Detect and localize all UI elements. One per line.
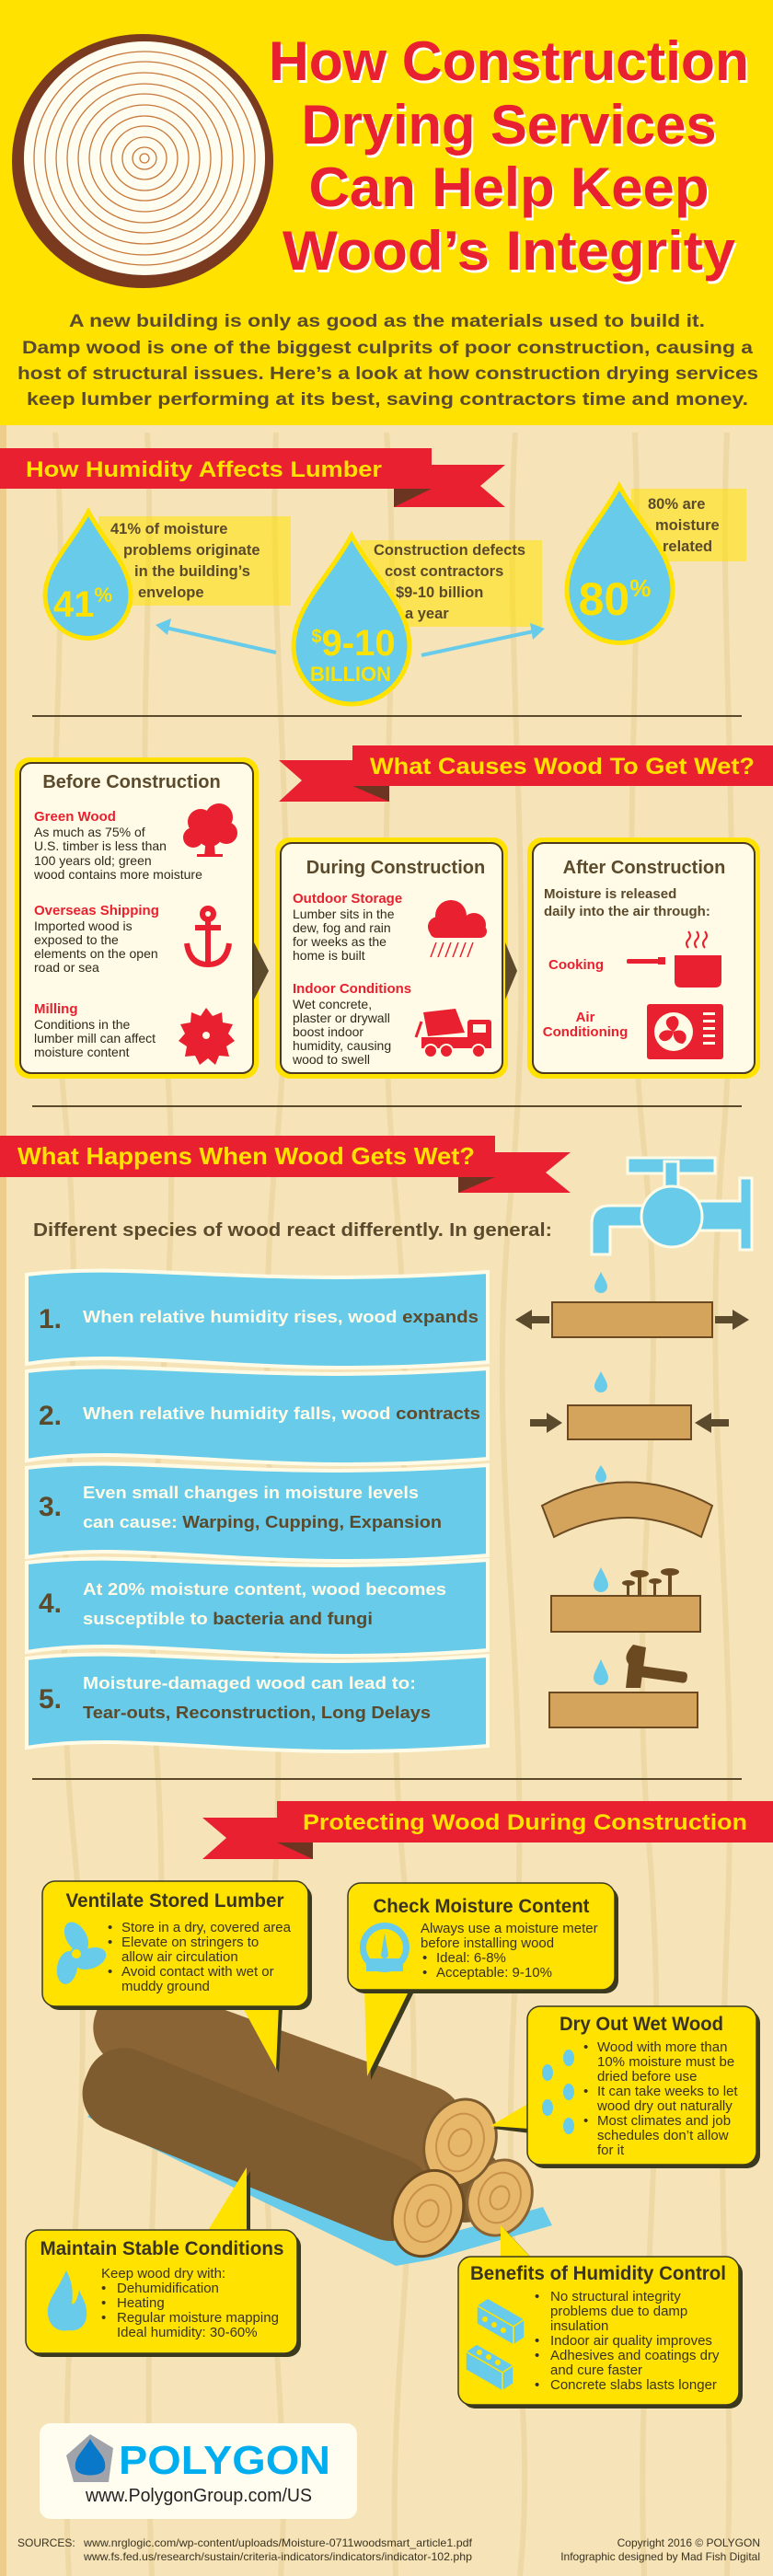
callout: benefits of humidity control: •: [535, 2377, 539, 2393]
callout: ventilate stored lumber: Store in a dry, covered area: [121, 1920, 292, 1935]
panel: after construction: After Construction: [563, 858, 725, 878]
text: outdoor storage: [293, 891, 402, 963]
logo box: www.PolygonGroup.com/US: [85, 2486, 312, 2506]
callout: dry out wet wood: Wood with more than: [597, 2039, 727, 2055]
callout: check moisture content: Check Moisture Content: [374, 1896, 589, 1917]
stat: 80%: 80: [579, 573, 629, 625]
icon: AC unit: [647, 1004, 723, 1059]
banner 5: tear-outs: [27, 1655, 488, 1751]
text: milling: moisture content: [34, 1045, 130, 1059]
banner 4: bacteria and fungi: [27, 1559, 488, 1656]
callout: dry out wet wood: •: [583, 2084, 588, 2099]
callout: maintain stable conditions: •: [101, 2310, 106, 2326]
logo box: [40, 2423, 357, 2519]
text: outdoor storage: Outdoor Storage: [293, 891, 402, 907]
ribbon: What Causes Wood To Get Wet?: [279, 745, 773, 802]
title: How Construction: [271, 33, 751, 95]
title: Drying Services: [302, 94, 716, 156]
text: outdoor storage: Lumber sits in the: [293, 907, 395, 921]
ribbon: How Humidity Affects Lumber: How Humidity Affects Lumber: [26, 457, 382, 482]
callout: check moisture content: [348, 1883, 618, 2080]
banner 2: contracts: 2.: [39, 1401, 62, 1431]
stat: 41%: problems originate: [123, 542, 260, 559]
text: milling: Conditions in the: [34, 1017, 131, 1032]
ribbon: Protecting Wood During Construction: [202, 1801, 773, 1859]
icon: board with hammer: [549, 1645, 698, 1727]
text: green wood: Green Wood: [34, 809, 116, 825]
callout: benefits of humidity control: [458, 2225, 743, 2409]
callout: dry out wet wood: for it: [597, 2143, 625, 2158]
text: milling: Milling: [34, 1001, 77, 1017]
callout: benefits of humidity control: and cure faster: [550, 2362, 642, 2378]
panel: before construction: Before Construction: [42, 772, 221, 792]
callout: check moisture content: Acceptable: 9-10%: [436, 1965, 552, 1981]
callout: benefits of humidity control: •: [535, 2348, 539, 2363]
callout: ventilate stored lumber: •: [108, 1964, 112, 1980]
banner 1: expands: [27, 1271, 488, 1368]
stat: 41%: in the building’s: [134, 563, 250, 580]
text: green wood: As much as 75% of: [34, 825, 145, 839]
callout: benefits of humidity control: insulation: [550, 2318, 608, 2334]
title: Wood’s Integrity: [284, 223, 738, 284]
panel: after construction: Conditioning: [543, 1024, 628, 1040]
text: indoor conditions: humidity, causing: [293, 1038, 391, 1053]
sources: SOURCES:: [17, 2536, 75, 2549]
banner 3: warping: Even small changes in moisture levels: [83, 1484, 419, 1502]
title: Wood’s Integrity: [283, 220, 736, 282]
text: indoor conditions: plaster or drywall: [293, 1011, 390, 1025]
logo box: POLYGON: [119, 2438, 330, 2483]
copyright: [560, 2536, 760, 2563]
callout: dry out wet wood: Dry Out Wet Wood: [560, 2014, 723, 2035]
callout: ventilate stored lumber: •: [108, 1920, 112, 1935]
icon: saw blade: [179, 1008, 235, 1065]
callout: maintain stable conditions: Keep wood dry with:: [101, 2266, 225, 2281]
callout: benefits of humidity control: •: [535, 2333, 539, 2349]
banner 4: bacteria and fungi: susceptible to bacteria and fungi: [83, 1610, 373, 1628]
stat: $9-10 billion: 9-10: [322, 623, 396, 664]
callout: maintain stable conditions: Ideal humidity: 30-60%: [117, 2325, 258, 2340]
title: [269, 30, 751, 284]
stat: 41%: [45, 512, 260, 639]
panel: after construction: [527, 837, 760, 1079]
icon: anchor: [187, 908, 229, 965]
text: milling: lumber mill can affect: [34, 1031, 156, 1045]
copyright: Copyright 2016 © POLYGON: [617, 2536, 760, 2549]
text: overseas shipping: [34, 903, 159, 975]
callout: check moisture content: before installing wood: [421, 1935, 554, 1951]
callout: check moisture content: Ideal: 6-8%: [436, 1950, 506, 1966]
text: milling: [34, 1001, 156, 1059]
callout: benefits of humidity control: Adhesives and coatings dry: [550, 2348, 720, 2363]
banner 4: bacteria and fungi: At 20% moisture content, wood becomes: [83, 1580, 446, 1599]
callout: ventilate stored lumber: •: [108, 1935, 112, 1950]
banner 2: contracts: When relative humidity falls, wood contracts: [83, 1404, 480, 1423]
text: indoor conditions: [292, 981, 411, 1067]
text: overseas shipping: Overseas Shipping: [34, 903, 159, 918]
ribbon: What Causes Wood To Get Wet?: What Causes Wood To Get Wet?: [370, 754, 755, 780]
icon: tree: [183, 803, 237, 857]
callout: benefits of humidity control: No structural integrity: [550, 2289, 681, 2305]
icon: pot: [627, 931, 721, 988]
stat: 80%: [567, 486, 720, 642]
icon: contracting board: [530, 1371, 729, 1439]
callout: benefits of humidity control: problems due to damp: [550, 2304, 687, 2319]
callout: check moisture content: •: [422, 1965, 427, 1981]
panel: after construction: Moisture is released: [544, 886, 676, 902]
panel: after construction: daily into the air through:: [544, 904, 710, 919]
stat: 41%: 41: [53, 584, 94, 625]
callout: dry out wet wood: wood dry out naturally: [596, 2098, 733, 2114]
text: green wood: 100 years old; green: [34, 853, 152, 868]
intro paragraph: [17, 311, 758, 410]
text: green wood: U.S. timber is less than: [34, 838, 167, 853]
stat: 41%: envelope: [138, 584, 204, 601]
callout: ventilate stored lumber: Elevate on stringers to: [121, 1935, 259, 1950]
callout: ventilate stored lumber: allow air circulation: [121, 1949, 238, 1965]
banner 5: tear-outs: 5.: [39, 1684, 62, 1715]
text: different species: Different species of wood react differently. In general:: [33, 1219, 552, 1241]
intro paragraph: host of structural issues. Here’s a look at how construction drying services: [17, 364, 758, 384]
icon: board with mushrooms: [551, 1567, 700, 1632]
stat: $9-10 billion: $9-10 billion: [396, 584, 483, 601]
ribbon: Protecting Wood During Construction: Protecting Wood During Construction: [303, 1810, 747, 1835]
callout: dry out wet wood: It can take weeks to let: [597, 2084, 738, 2099]
stat: 80%: %: [629, 574, 651, 602]
text: indoor conditions: boost indoor: [293, 1024, 363, 1039]
icon: bricks: [466, 2298, 525, 2391]
stat: $9-10 billion: Construction defects: [374, 542, 525, 559]
title: How Construction: [269, 30, 749, 92]
callout: dry out wet wood: •: [583, 2039, 588, 2055]
panel: during construction: [275, 837, 517, 1079]
stat text boxes: [98, 489, 746, 627]
icon: flame: [48, 2270, 87, 2330]
text: indoor conditions: Wet concrete,: [293, 997, 372, 1011]
text: outdoor storage: dew, fog and rain: [293, 920, 391, 935]
title: Drying Services: [304, 97, 718, 158]
stat: $9-10 billion: [294, 536, 525, 704]
banner 1: expands: 1.: [39, 1304, 62, 1334]
icon: rain cloud: [428, 900, 487, 957]
icon: gauge: [360, 1923, 410, 1972]
title: Can Help Keep: [309, 156, 709, 218]
callout: check moisture content: Always use a moisture meter: [421, 1921, 598, 1936]
banner 2: contracts: [27, 1368, 488, 1464]
icon: fan: [54, 1918, 110, 1986]
text: green wood: wood contains more moisture: [33, 867, 202, 882]
callout: ventilate stored lumber: Avoid contact with wet or: [121, 1964, 274, 1980]
arrows between stats: [156, 618, 545, 655]
icon: warped board: [542, 1465, 712, 1537]
callout: maintain stable conditions: Heating: [117, 2295, 165, 2311]
callout: dry out wet wood: schedules don’t allow: [597, 2128, 729, 2143]
text: green wood: [33, 809, 202, 882]
text: outdoor storage: for weeks as the: [293, 934, 386, 949]
text: overseas shipping: road or sea: [34, 960, 99, 975]
callout: ventilate stored lumber: [42, 1881, 312, 2073]
stat: 41%: %: [94, 583, 112, 606]
callout: dry out wet wood: •: [583, 2113, 588, 2129]
stat: 80%: 80% are: [648, 496, 705, 513]
callout: benefits of humidity control: •: [535, 2289, 539, 2305]
text: outdoor storage: home is built: [293, 948, 365, 963]
callout: maintain stable conditions: [26, 2167, 301, 2357]
ribbon: What Happens When Wood Gets Wet?: What Happens When Wood Gets Wet?: [17, 1142, 475, 1170]
callout: check moisture content: •: [422, 1950, 427, 1966]
logs illustration: [70, 1969, 552, 2267]
callout: ventilate stored lumber: muddy ground: [121, 1979, 210, 1994]
sources: www.nrglogic.com/wp-content/uploads/Moisture-0711woodsmart_article1.pdf: [83, 2536, 473, 2549]
icon: tree ring slice: [12, 34, 273, 288]
banner 3: warping: [27, 1464, 488, 1561]
text: indoor conditions: Indoor Conditions: [293, 981, 411, 997]
text: overseas shipping: Imported wood is: [34, 918, 133, 933]
stat: $9-10 billion: BILLION: [310, 663, 391, 686]
text: indoor conditions: wood to swell: [292, 1052, 370, 1067]
callout: benefits of humidity control: Concrete slabs lasts longer: [550, 2377, 717, 2393]
icon: polygon logo: [66, 2434, 113, 2482]
stat: $9-10 billion: cost contractors: [385, 563, 503, 580]
text: overseas shipping: elements on the open: [34, 946, 158, 961]
callout: dry out wet wood: [490, 2006, 760, 2168]
text: air conditioning: Air: [576, 1010, 595, 1025]
banner 4: bacteria and fungi: 4.: [39, 1588, 62, 1619]
banner 1: expands: When relative humidity rises, wood expands: [83, 1308, 479, 1326]
intro paragraph: Damp wood is one of the biggest culprits of poor construction, causing a: [22, 338, 753, 358]
stat: 41%: 41% of moisture: [110, 521, 227, 537]
callout: maintain stable conditions: Maintain Stable Conditions: [40, 2238, 283, 2259]
stat: $9-10 billion: $: [311, 627, 322, 647]
sources: www.fs.fed.us/research/sustain/criteria-indicators/indicators/indicator-102.php: [83, 2550, 472, 2563]
banner 5: tear-outs: Tear-outs, Reconstruction, Long Delays: [83, 1704, 431, 1722]
title: Can Help Keep: [311, 159, 710, 221]
icon: cement truck: [416, 1009, 491, 1057]
text: overseas shipping: exposed to the: [34, 932, 119, 947]
icon: expanding board: [515, 1272, 749, 1337]
banner 3: warping: can cause: Warping, Cupping, Expansion: [83, 1513, 442, 1531]
callout: benefits of humidity control: Benefits of Humidity Control: [470, 2263, 726, 2284]
icon: faucet: [592, 1158, 752, 1254]
callout: ventilate stored lumber: Ventilate Stored Lumber: [66, 1890, 283, 1912]
callout: maintain stable conditions: Dehumidification: [117, 2281, 219, 2296]
callout: dry out wet wood: dried before use: [597, 2069, 697, 2085]
stat: 80%: moisture: [655, 517, 720, 534]
intro paragraph: keep lumber performing at its best, saving contractors time and money.: [27, 389, 748, 410]
callout: dry out wet wood: Most climates and job: [597, 2113, 731, 2129]
intro paragraph: A new building is only as good as the materials used to build it.: [69, 311, 705, 331]
panel: during construction: During Construction: [306, 858, 485, 878]
callout: maintain stable conditions: •: [101, 2295, 106, 2311]
stat: 80%: related: [663, 538, 712, 555]
text: cooking: Cooking: [548, 957, 604, 973]
icon: water drops: [542, 2050, 574, 2134]
ribbon: How Humidity Affects Lumber: [0, 448, 505, 507]
callout: dry out wet wood: 10% moisture must be: [597, 2054, 734, 2070]
header background: [0, 0, 773, 425]
copyright: Infographic designed by Mad Fish Digital: [560, 2550, 760, 2563]
callout: benefits of humidity control: Indoor air quality improves: [550, 2333, 712, 2349]
banner 3: warping: 3.: [39, 1492, 62, 1522]
stat: $9-10 billion: a year: [405, 606, 449, 622]
panel: before construction: [15, 757, 269, 1079]
ribbon: What Happens When Wood Gets Wet?: [0, 1136, 571, 1193]
sources: [17, 2536, 473, 2563]
callout: maintain stable conditions: Regular moisture mapping: [117, 2310, 279, 2326]
callout: maintain stable conditions: •: [101, 2281, 106, 2296]
banner 5: tear-outs: Moisture-damaged wood can lead to:: [83, 1674, 416, 1692]
